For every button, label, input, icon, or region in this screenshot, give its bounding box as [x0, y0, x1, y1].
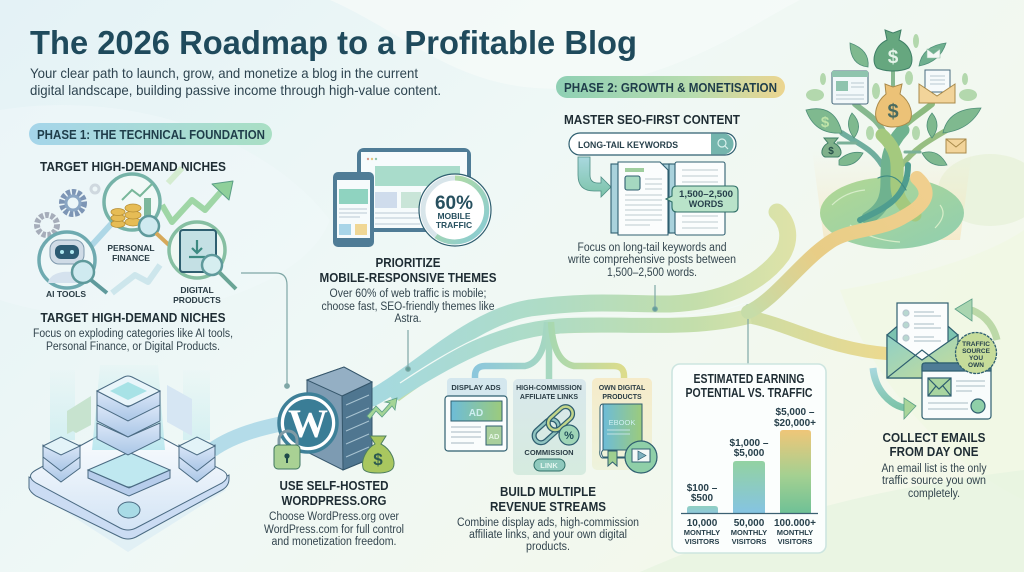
icon: digital products tablet	[169, 222, 236, 289]
axis labels: VISITORS	[732, 537, 766, 546]
text: collect emails: FROM DAY ONE	[890, 445, 978, 459]
heading: MASTER SEO-FIRST CONTENT	[564, 113, 740, 127]
value labels: $20,000+	[774, 418, 816, 429]
text: self-hosted WordPress: Choose WordPress.org over	[269, 511, 399, 523]
icon: AI tools robot	[39, 232, 107, 293]
panel: target high-demand niches	[33, 160, 236, 353]
panel: SEO-first content	[564, 113, 740, 279]
icon: personal finance coins	[104, 174, 170, 246]
text: build multiple revenue streams: Combine display ads, high-commission	[457, 517, 639, 529]
60% mobile traffic gauge	[419, 174, 491, 246]
floating document	[167, 385, 192, 436]
phase 1 badge: PHASE 1: THE TECHNICAL FOUNDATION	[37, 128, 265, 142]
icon: small envelope	[946, 139, 966, 153]
card: display ads	[445, 378, 507, 451]
text: build multiple revenue streams	[457, 485, 639, 553]
server tower	[307, 367, 372, 470]
heading: niches top: TARGET HIGH-DEMAND NICHES	[40, 160, 226, 174]
subtitle: Your clear path to launch, grow, and monetize a blog in the current	[30, 65, 418, 81]
axis labels: 50,000	[734, 518, 765, 529]
icon: orange money bag: $	[887, 101, 899, 123]
value labels: $500	[691, 493, 714, 504]
left mini stack	[43, 437, 80, 482]
description: Focus on long-tail keywords and	[578, 242, 726, 254]
text: mobile-responsive themes: MOBILE-RESPONSIVE THEMES	[320, 271, 496, 285]
phase 2 badge: PHASE 2: GROWTH & MONETISATION	[564, 81, 777, 95]
axis labels: VISITORS	[685, 537, 719, 546]
text: mobile-responsive themes: PRIORITIZE	[376, 256, 440, 270]
panel: collect emails	[873, 299, 997, 500]
subtitle: digital landscape, building passive income through high-value content.	[30, 82, 441, 98]
callout: word count: 1,500–2,500	[679, 189, 733, 199]
description: niches: Focus on exploding categories like AI tools,	[33, 328, 233, 340]
icon: growth arrows	[92, 168, 233, 293]
axis labels: MONTHLY	[684, 528, 720, 537]
badge: traffic source you own: YOU	[969, 355, 983, 362]
icon: orange money bag	[876, 84, 911, 127]
search bar: LONG-TAIL KEYWORDS	[578, 140, 678, 151]
60% mobile traffic gauge: MOBILE	[437, 211, 471, 221]
icon: small money bag	[822, 138, 841, 157]
text: collect emails: COLLECT EMAILS	[882, 431, 986, 445]
text: build multiple revenue streams: BUILD MULTIPLE	[500, 485, 596, 499]
text: build multiple revenue streams: REVENUE STREAMS	[490, 500, 606, 514]
text: mobile-responsive themes: Astra.	[394, 313, 422, 325]
panel: revenue streams	[445, 322, 657, 553]
label: digital products: PRODUCTS	[173, 295, 221, 305]
icon: green money bag	[874, 30, 912, 71]
branches	[838, 72, 947, 165]
badge: traffic source you own: TRAFFIC	[962, 341, 990, 348]
card: display ads: AD	[489, 432, 500, 441]
description	[567, 242, 736, 279]
axis labels: MONTHLY	[777, 528, 813, 537]
bars	[681, 430, 818, 514]
browser window with email	[922, 363, 991, 419]
text: self-hosted WordPress	[264, 479, 404, 548]
central server stack	[97, 376, 160, 455]
description: niches: Personal Finance, or Digital Products.	[46, 341, 220, 353]
title: The 2026 Roadmap to a Profitable Blog	[30, 25, 637, 62]
growth arrow	[367, 398, 397, 419]
badge: traffic source you own: OWN	[968, 362, 984, 369]
card: own digital products: EBOOK	[609, 418, 635, 427]
illustration: isometric server platform	[29, 365, 229, 552]
icon: gears	[37, 185, 99, 235]
axis labels: MONTHLY	[731, 528, 767, 537]
card: affiliate links: COMMISSION	[524, 448, 574, 457]
icon: leaf envelope	[927, 49, 940, 58]
value labels	[687, 407, 816, 504]
tablet	[357, 148, 471, 232]
text: self-hosted WordPress: WORDPRESS.ORG	[282, 494, 386, 508]
padlock	[274, 431, 300, 469]
card: own digital products: OWN DIGITAL	[599, 385, 646, 392]
illustration: money tree	[748, 30, 981, 312]
phase 1 badge	[29, 123, 272, 145]
text: collect emails: traffic source you own	[882, 475, 986, 487]
callout: word count: WORDS	[689, 199, 723, 209]
phone	[333, 172, 374, 247]
WordPress logo: W	[288, 401, 328, 446]
text: build multiple revenue streams: affiliate links, and your own digital	[469, 529, 627, 541]
text: self-hosted WordPress: USE SELF-HOSTED	[280, 479, 388, 493]
branching pipes	[475, 322, 624, 379]
phase 2 badge	[556, 76, 785, 98]
twisted trunk	[860, 130, 915, 220]
text: self-hosted WordPress: and monetization freedom.	[272, 536, 396, 548]
icon: envelope with letter	[919, 70, 955, 103]
text: collect emails: completely.	[908, 488, 960, 500]
card: own digital products: PRODUCTS	[602, 394, 642, 401]
small leaves	[806, 34, 977, 140]
connector lines	[241, 273, 750, 388]
text: mobile-responsive themes: Over 60% of web traffic is mobile;	[330, 288, 486, 300]
value labels: $5,000	[734, 448, 765, 459]
text: self-hosted WordPress: WordPress.com for full control	[264, 524, 404, 536]
illustration: mobile and tablet devices	[333, 148, 491, 247]
text: build multiple revenue streams: products.	[526, 541, 570, 553]
value labels: $5,000 –	[776, 407, 815, 418]
icon: browser window	[832, 71, 868, 104]
badge: traffic source you own	[956, 332, 996, 374]
card: display ads: AD	[469, 408, 483, 419]
value labels: $100 –	[687, 483, 718, 494]
description: write comprehensive posts between	[567, 254, 736, 266]
axis labels: VISITORS	[778, 537, 812, 546]
description: niches	[33, 328, 233, 353]
description: 1,500–2,500 words.	[607, 267, 697, 279]
chart title: POTENTIAL VS. TRAFFIC	[686, 386, 812, 400]
60% mobile traffic gauge: TRAFFIC	[436, 220, 472, 230]
chart title	[686, 372, 812, 400]
card: display ads: DISPLAY ADS	[451, 383, 501, 392]
chart title: ESTIMATED EARNING	[694, 372, 804, 386]
golden path to tree	[748, 178, 926, 312]
article pages	[611, 162, 725, 235]
icon: green money bag: $	[888, 47, 899, 68]
money bag: $	[373, 450, 383, 469]
axis labels	[684, 518, 816, 546]
search bar	[569, 133, 736, 155]
callout: word count	[666, 186, 738, 212]
leaves	[806, 43, 981, 166]
text: mobile-responsive themes	[320, 256, 496, 325]
tree glow	[812, 150, 972, 240]
heading: niches bottom: TARGET HIGH-DEMAND NICHES	[40, 311, 226, 325]
label: digital products: DIGITAL	[180, 285, 214, 295]
card: affiliate links	[513, 379, 586, 475]
chart card: earning potential vs traffic	[672, 364, 826, 553]
chat bubble	[67, 396, 91, 434]
label: personal finance: PERSONAL	[107, 243, 155, 253]
journey ribbon	[212, 212, 892, 450]
axis labels: 100.000+	[774, 518, 816, 529]
card: affiliate links: AFFILIATE LINKS	[520, 394, 578, 401]
label: personal finance: FINANCE	[112, 253, 150, 263]
text: collect emails: An email list is the only	[882, 463, 987, 475]
axis labels: 10,000	[687, 518, 718, 529]
text: collect emails	[882, 431, 987, 500]
card: affiliate links: %	[564, 430, 574, 442]
subtitle	[30, 65, 441, 98]
circular arrows	[873, 299, 997, 419]
right mini stack	[179, 437, 215, 482]
value labels: $1,000 –	[730, 438, 769, 449]
arrow: keywords to article	[578, 157, 611, 197]
button	[118, 502, 140, 518]
label: ai tools: AI TOOLS	[46, 289, 86, 299]
icon: small money bag: $	[828, 146, 834, 157]
pond	[820, 177, 964, 249]
text: mobile-responsive themes: choose fast, SEO-friendly themes like	[322, 301, 494, 313]
icon group: self-hosted WordPress	[274, 367, 397, 473]
envelope with contact list	[887, 303, 958, 378]
badge: traffic source you own: SOURCE	[962, 348, 991, 355]
base pad	[88, 453, 170, 496]
card: affiliate links: HIGH-COMMISSION	[516, 385, 582, 392]
icon: leaf dollar: $	[821, 114, 830, 131]
card: affiliate links: LINK	[540, 461, 558, 470]
60% mobile traffic gauge: 60%	[435, 193, 473, 214]
card: own digital products	[592, 378, 657, 473]
